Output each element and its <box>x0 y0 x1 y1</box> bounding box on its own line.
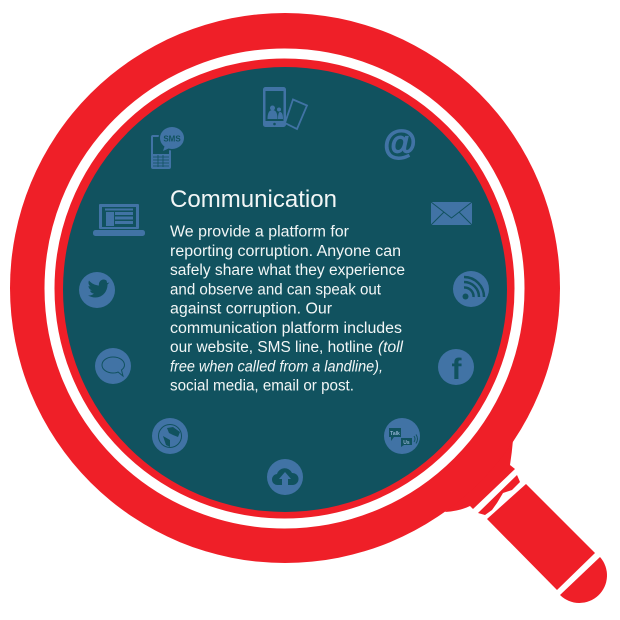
icon: talk bubbles <box>384 418 420 454</box>
lens face <box>63 67 507 512</box>
body text: social media, email or post. <box>170 378 354 394</box>
icon: Twitter <box>79 272 115 308</box>
body text: (toll <box>378 339 404 356</box>
icon: talk bubbles: Us <box>403 440 410 446</box>
icon: SMS phone: SMS <box>163 134 181 144</box>
white lens ring <box>50 54 520 524</box>
icon: laptop <box>93 204 145 236</box>
body text: reporting corruption. Anyone can <box>170 243 401 260</box>
body text: free when called from a landline), <box>170 358 383 375</box>
icon: RSS <box>453 271 489 307</box>
icon: globe <box>152 418 188 454</box>
handle grip <box>487 484 595 590</box>
icon: Facebook: f <box>452 353 462 386</box>
icon: Facebook <box>438 349 474 386</box>
body text: We provide a platform for <box>170 224 349 240</box>
body text: safely share what they experience <box>170 262 405 279</box>
outer lens ring <box>10 13 560 563</box>
icon: envelope <box>431 202 472 225</box>
body text: and observe and can speak out <box>170 281 382 298</box>
handle cap <box>560 557 607 603</box>
body text: our website, SMS line, hotline <box>170 339 373 356</box>
handle collar <box>478 475 520 515</box>
body text: against corruption. Our <box>170 300 332 318</box>
icon: at sign: @ <box>383 124 417 162</box>
title: Communication <box>170 186 337 213</box>
icon: talk bubbles: Talk <box>390 431 400 437</box>
icon: SMS phone <box>151 126 186 169</box>
icon: speech bubble <box>95 348 131 384</box>
icon: cloud upload <box>267 459 303 495</box>
icon: phone and tablet <box>263 87 307 129</box>
body text <box>170 224 405 394</box>
body text: communication platform includes <box>170 320 402 337</box>
handle neck <box>445 440 515 512</box>
